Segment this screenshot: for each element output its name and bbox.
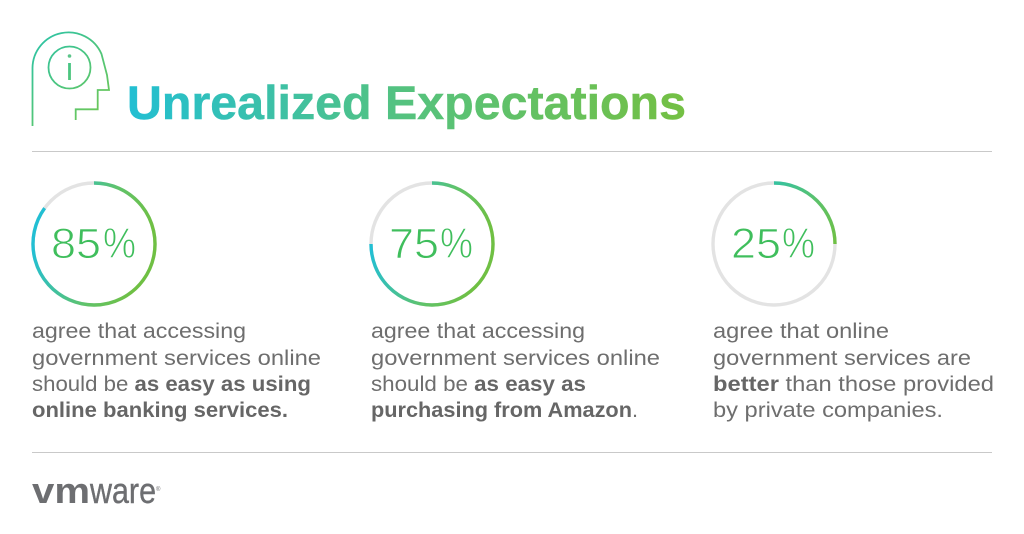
description: 25%: by private companies. bbox=[713, 398, 943, 422]
description: 25%: agree that online bbox=[713, 319, 889, 343]
title: Unrealized Expectations bbox=[127, 76, 686, 129]
value: 85%: % bbox=[103, 220, 136, 268]
logo: vmware bbox=[32, 470, 161, 511]
donut chart: 75% bbox=[371, 183, 493, 305]
value: 85%: 85 bbox=[51, 220, 101, 268]
description: 85% bbox=[32, 319, 321, 422]
description: 25% bbox=[713, 319, 994, 422]
donut chart: 25% bbox=[713, 183, 835, 305]
value: 25%: 25 bbox=[731, 220, 781, 268]
description: 75%: government services online bbox=[371, 346, 660, 370]
description: 75%: purchasing from Amazon. bbox=[371, 398, 638, 422]
icon: head with info symbol bbox=[32, 32, 109, 126]
description: 75%: agree that accessing bbox=[371, 319, 585, 343]
description: 85%: should be as easy as using bbox=[32, 372, 311, 396]
logo: vmware: vm bbox=[32, 470, 90, 511]
description: 25%: government services are bbox=[713, 346, 971, 370]
value: 25% bbox=[731, 220, 815, 268]
description: 75%: should be as easy as bbox=[371, 372, 586, 396]
description: 85%: online banking services. bbox=[32, 398, 288, 422]
value: 75% bbox=[389, 220, 473, 268]
logo: vmware: ware bbox=[89, 470, 156, 511]
donut chart: 85% bbox=[33, 183, 155, 305]
value: 75%: % bbox=[440, 220, 473, 268]
panel: 25% stat bbox=[713, 183, 994, 422]
description: 25%: better than those provided bbox=[713, 372, 994, 396]
panel: 75% stat bbox=[371, 183, 660, 422]
description: 85%: government services online bbox=[32, 346, 321, 370]
value: 75%: 75 bbox=[389, 220, 439, 268]
value: 25%: % bbox=[782, 220, 815, 268]
logo: vmware: ® bbox=[156, 486, 161, 493]
value: 85% bbox=[51, 220, 136, 268]
description: 75% bbox=[371, 319, 660, 422]
panel: 85% stat bbox=[32, 183, 321, 422]
description: 85%: agree that accessing bbox=[32, 319, 246, 343]
